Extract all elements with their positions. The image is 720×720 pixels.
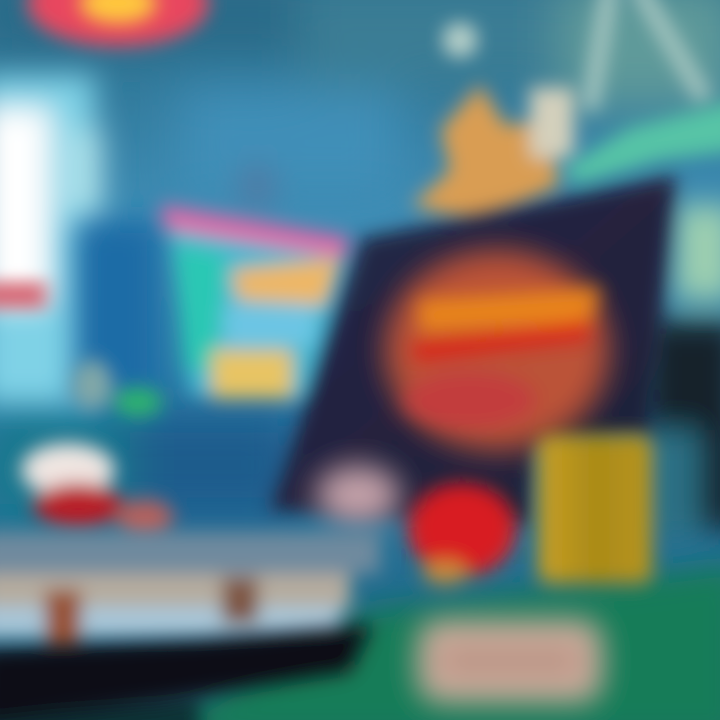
lower left shade (0, 700, 200, 720)
upper wall tones (0, 0, 720, 520)
blue column (75, 165, 274, 405)
teal ribbon (565, 100, 720, 185)
dark right side (645, 205, 720, 540)
dark board (270, 175, 676, 525)
red blob (408, 484, 516, 584)
dark table base (0, 625, 372, 720)
red painted circle on board (385, 250, 609, 450)
beige box (418, 620, 602, 702)
green floor (140, 565, 720, 720)
small pale globe (443, 23, 477, 57)
red and white cup (22, 444, 173, 536)
left edge red stripe (0, 282, 46, 308)
ceiling lamp (28, 0, 208, 46)
board painted stripes (405, 288, 600, 428)
pink blob (316, 465, 400, 525)
colourful wall panel (72, 205, 350, 416)
table top (0, 532, 380, 650)
orange star shape (412, 85, 574, 225)
yellow cylinder (538, 435, 652, 583)
window glow (0, 75, 102, 405)
hanging strings (590, 0, 705, 110)
